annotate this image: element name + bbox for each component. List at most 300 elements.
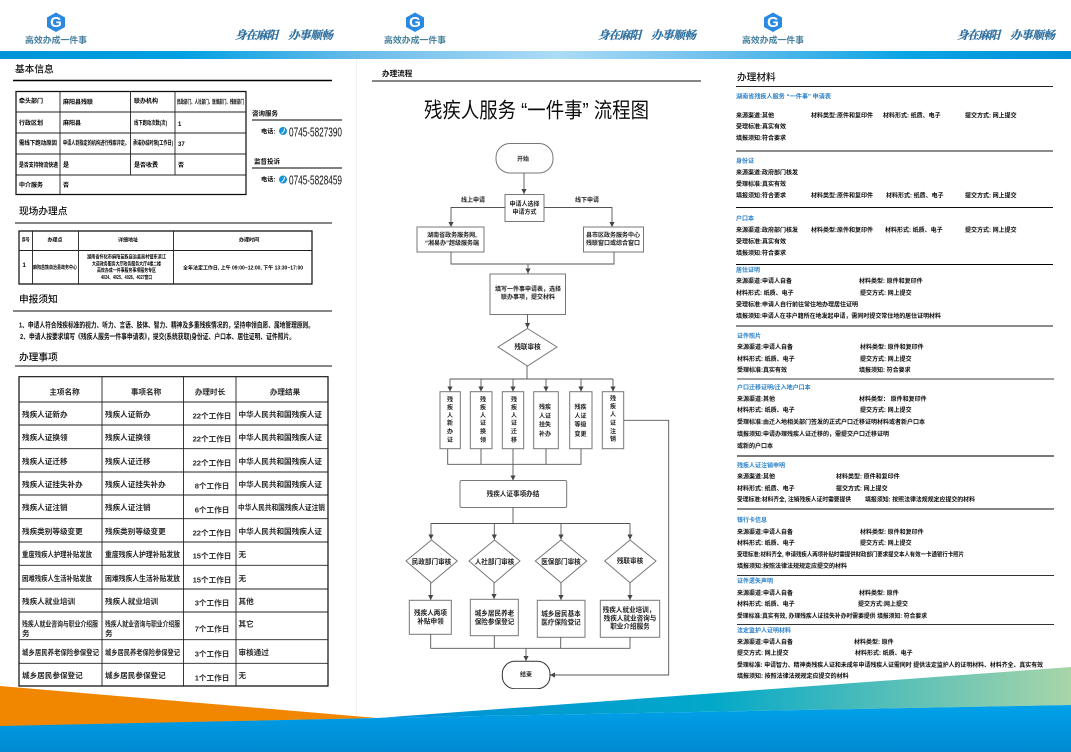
node: fill form: 填写一件事申请表，选择 (495, 285, 561, 293)
complaint service (252, 156, 342, 188)
table rows: 困难残疾人生活补贴发放 (105, 573, 180, 583)
node: choose method: 申请人选择 (509, 200, 540, 208)
material: residence proof: 来源渠道:申请人自备 (736, 277, 792, 285)
table rows: 困难残疾人生活补贴发放 (22, 573, 92, 583)
node: grade change: 人证 (574, 412, 587, 420)
table: on-site locations (19, 231, 312, 284)
node: cancel certificate: 人 (610, 412, 616, 418)
heading: on-site locations: 现场办理点 (19, 204, 68, 218)
heading: application notes: 申报须知 (19, 292, 58, 306)
table: basic info: 中介服务 (19, 181, 43, 189)
material: household transfer: 材料类型： 原件和复印件 (859, 395, 927, 403)
material: guardian proof: 提交方式: 网上提交 (737, 649, 789, 657)
branch arrows to departments (431, 508, 630, 540)
table header (49, 386, 301, 396)
table: on-site locations: 大道政务服务大厅政务服务大厅4楼二楼 (92, 260, 161, 268)
material: photo: 材料类型: 原件和复印件 (860, 343, 924, 351)
table: basic info: 1 (178, 122, 182, 128)
node: online portal: “湘易办”超级服务端 (425, 239, 479, 247)
table rows: 残疾人证挂失补办 (22, 479, 83, 489)
node: employment services (600, 600, 660, 637)
logo centre (384, 12, 446, 45)
node: lost certificate: 挂失 (539, 420, 551, 428)
page divider left (356, 59, 358, 716)
table rows: 残疾类别等级变更 (22, 526, 83, 536)
material: bank card: 受理标准:材料齐全, 申请残疾人两项补贴时需提供财政部门要求提交本人有效一卡通银行卡照片 (737, 550, 964, 558)
table rows: 22个工作日 (193, 434, 231, 444)
node: replace certificate: 疾 (480, 404, 486, 412)
table: basic info: 37 (178, 142, 185, 148)
footer decoration (0, 667, 1071, 752)
node: lost certificate: 残疾 (539, 403, 551, 411)
application notes text: 1、申请人符合残疾标准的视力、听力、言语、肢体、智力、精神及多重残疾情况的，坚持申领自愿、属地管理原则。 (19, 320, 314, 330)
slogan right: 身在麻阳 (957, 29, 1002, 42)
table rows: 残疾人就业咨询与职业介绍服 (22, 618, 98, 628)
material: loss statement: 材料形式: 纸质、电子 (737, 600, 795, 608)
table: on-site locations: 湖南省怀化市麻阳苗族自治县高村镇东滨江 (87, 254, 166, 260)
material: residence proof: 居住证明 (736, 266, 760, 274)
flowchart (406, 144, 669, 689)
material: photo (737, 332, 1054, 379)
table header: 事项名称 (131, 386, 162, 396)
table: basic info: 麻阳县 (63, 119, 81, 127)
table: on-site locations: 全年法定工作日, 上午 09:00~12:00, 下午 13:30~17:00 (183, 264, 303, 272)
decision: medical insurance (535, 540, 587, 583)
heading: basic info: 基本信息 (15, 62, 54, 76)
material: household register: 户口本 (736, 214, 754, 222)
table: basic info: 否 (63, 182, 69, 189)
node: offline window (584, 227, 644, 252)
start node (496, 144, 553, 173)
material: bank card: 材料类型: 原件和复印件 (860, 528, 924, 536)
decision: civil affairs: 民政部门审核 (412, 557, 452, 566)
material: household transfer: 材料形式: 纸质、电子 (737, 406, 795, 414)
table rows: 8个工作日 (195, 480, 229, 490)
node: items completed (460, 480, 567, 508)
table: on-site locations: 办理时间 (239, 236, 259, 244)
material: application form: 受理标准:真实有效 (736, 122, 786, 130)
table rows: 残疾人证换领 (105, 432, 151, 442)
branch online (451, 196, 505, 227)
table rows: 残疾类别等级变更 (105, 526, 166, 536)
table: basic info: 线下跑动次数(次) (134, 119, 167, 127)
node: fill form: 联办事项，提交材料 (501, 293, 555, 301)
slogan right: 办事顺畅 (1010, 29, 1056, 42)
material: household transfer: 受理标准:由迁入地相关部门签发的正式户口迁移证明材料或者新户口本 (737, 418, 925, 426)
material: ID card (736, 157, 1053, 208)
table rows: 重度残疾人护理补贴发放 (105, 549, 180, 559)
table rows: 中华人民共和国残疾人证 (238, 526, 322, 536)
node: transfer certificate: 人 (511, 412, 517, 420)
slogan centre: 办事顺畅 (651, 29, 698, 42)
table rows: 22个工作日 (193, 458, 231, 468)
node: replace certificate (470, 392, 492, 449)
node: grade change: 残疾 (574, 403, 587, 411)
arrow: cancel to end (550, 420, 669, 675)
material: cancellation statement: 提交方式: 网上提交 (836, 484, 888, 492)
decision: disability federation review: 残联审核 (514, 342, 541, 351)
end node (502, 661, 550, 689)
logo right: G (767, 14, 779, 31)
consult service: 咨询服务 (252, 108, 278, 118)
table rows: 城乡居民参保登记 (22, 670, 83, 680)
material: household transfer: 或新的户口本 (737, 442, 773, 450)
table: basic info: 行政区划 (19, 119, 43, 127)
material: loss statement: 来源渠道:申请人自备 (737, 589, 793, 597)
table rows: 22个工作日 (193, 528, 231, 538)
material: application form: 填报须知:符合要求 (736, 134, 786, 142)
application notes text: 2、申请人按要求填写《残疾人服务一件事申请表》，提交(系统获取)身份证、户口本、居住证明、证件照片。 (20, 332, 295, 341)
table: basic info: 是否收费 (134, 161, 158, 169)
table rows: 6个工作日 (195, 504, 229, 514)
node: cancel certificate: 注 (610, 428, 616, 436)
material: household register: 提交方式: 网上提交 (965, 226, 1017, 234)
table rows: 残疾人证注销 (105, 502, 151, 512)
material: cancellation statement: 残疾人证注销申明 (737, 462, 785, 470)
table rows: 残疾人证迁移 (22, 456, 68, 466)
node: transfer certificate: 残 (511, 396, 517, 404)
material: household transfer: 填报须知:申请办理残疾人证迁移的，需提交户口迁移证明 (737, 430, 889, 438)
material: residence proof: 填报须知:申请人在非户籍所在地发起申请，需同时提交常住地的居住证明材料 (736, 312, 941, 320)
material: ID card: 受理标准:真实有效 (736, 180, 786, 188)
node: transfer certificate (502, 392, 524, 449)
slogan left: 办事顺畅 (288, 29, 334, 42)
table rows: 中华人民共和国残疾人证 (238, 456, 322, 466)
material: residence proof: 提交方式: 网上提交 (860, 289, 912, 297)
node: employment services: 残疾人就业咨询与 (604, 614, 657, 622)
node: medical insurance registration (537, 600, 585, 637)
table rows: 中华人民共和国残疾人证注销 (238, 502, 325, 512)
material: application form: 来源渠道:其他 (736, 112, 774, 120)
table rows: 城乡居民参保登记 (105, 670, 166, 680)
material: loss statement: 材料类型: 原件 (859, 589, 899, 597)
material: household register (736, 214, 1053, 264)
table header: 办理结果 (270, 386, 301, 396)
table: basic info: 牵头部门 (19, 97, 43, 105)
material: cancellation statement: 材料形式: 纸质、电子 (737, 484, 795, 492)
material: application form (736, 92, 1053, 151)
node: online portal: 湖南省政务服务网, (427, 231, 477, 239)
table rows: 残疾人证新办 (22, 409, 68, 419)
decision: civil affairs (406, 540, 457, 583)
table: on-site locations: 详细地址 (118, 236, 138, 244)
material: cancellation statement: 受理标准:材料齐全, 注销残疾人证时需要提供 (737, 496, 851, 504)
node: choose method (505, 194, 544, 222)
start node: 开始 (517, 155, 529, 163)
node: offline window: 县市区政务服务中心 (586, 231, 640, 239)
header gradient band (0, 51, 1071, 59)
decision: disability federation: 残联审核 (617, 556, 644, 565)
slogan left (235, 29, 334, 42)
node: cancel certificate: 证 (610, 419, 616, 427)
decision: disability federation (605, 540, 656, 583)
arrows to department results (431, 583, 630, 600)
table rows: 城乡居民养老保险参保登记 (105, 647, 180, 657)
material: household transfer: 来源渠道:其他 (737, 395, 775, 403)
table: on-site locations: 麻阳苗族自治县政务中心 (33, 264, 77, 271)
node: fill form (490, 274, 566, 314)
table rows: 7个工作日 (195, 624, 229, 634)
node: offline window: 残联窗口或综合窗口 (586, 239, 640, 247)
heading: items: 办理事项 (19, 350, 58, 364)
merge arrow to end (431, 634, 630, 661)
material: household register: 填报须知:符合要求 (736, 249, 786, 257)
material: photo: 证件照片 (737, 332, 761, 340)
node: cancel certificate: 残 (610, 394, 616, 402)
material: household transfer (737, 384, 1054, 456)
node: pension insurance: 保险参保登记 (475, 617, 515, 626)
material: guardian proof: 来源渠道:申请人自备 (737, 638, 793, 646)
node: lost certificate: 人证 (539, 412, 551, 420)
node: replace certificate: 领 (480, 436, 486, 444)
node: new certificate: 疾 (447, 404, 453, 412)
decision: human resources: 人社部门审核 (475, 557, 515, 566)
heading: materials: 办理材料 (737, 70, 776, 84)
node: two subsidies (409, 600, 451, 634)
material: application form: 提交方式: 网上提交 (965, 112, 1017, 120)
table header: 主项名称 (49, 386, 80, 396)
material: ID card: 来源渠道:政府部门核发 (736, 168, 798, 176)
table rows: 22个工作日 (193, 410, 231, 420)
table: basic info: 否 (178, 162, 184, 169)
slogan centre (598, 29, 698, 42)
node: medical insurance registration: 城乡居民基本 (541, 609, 581, 618)
node: employment services: 残疾人就业培训， (603, 605, 655, 614)
material: guardian proof: 材料类型: 原件 (854, 638, 894, 646)
table rows: 残疾人就业培训 (22, 596, 76, 606)
table rows: 其他 (238, 596, 254, 606)
complaint service: 0745-5828459 (289, 174, 342, 188)
node: lost certificate (534, 392, 558, 449)
node: new certificate: 残 (447, 396, 453, 404)
material: household register: 材料形式: 纸质、电子 (885, 226, 943, 234)
material: photo: 受理标准:真实有效 (737, 366, 787, 374)
material: household register: 材料类型:原件和复印件 (811, 226, 873, 234)
table rows: 无 (238, 574, 246, 583)
complaint service: 监督投诉 (254, 156, 280, 166)
consult service: 0745-5827390 (289, 126, 342, 140)
material: guardian proof: 填报须知: 按照法律法规规定应提交的材料 (737, 672, 849, 680)
slogan left: 身在麻阳 (235, 29, 280, 42)
table: on-site locations: 4024、4025、4026、4027窗口 (101, 274, 152, 281)
complaint service: 电话: (261, 176, 275, 184)
material: bank card: 来源渠道:申请人自备 (737, 528, 793, 536)
material: ID card: 材料类型:原件和复印件 (811, 192, 873, 200)
node: medical insurance registration: 医疗保险登记 (541, 618, 581, 626)
node: two subsidies: 补贴申领 (417, 616, 444, 626)
table rows: 残疾人证注销 (22, 502, 68, 512)
material: guardian proof (737, 626, 1043, 680)
material: cancellation statement: 填报须知: 按照法律法规规定应提交的材料 (865, 496, 975, 504)
table rows: 无 (238, 550, 246, 559)
table rows: 其它 (238, 618, 254, 628)
material: loss statement (737, 577, 1054, 624)
table rows: 3个工作日 (195, 598, 229, 608)
logo centre: 高效办成一件事 (384, 34, 446, 45)
material: household register: 来源渠道:政府部门核发 (736, 226, 798, 234)
material: bank card: 填报须知:按照法律法规规定应提交的材料 (737, 562, 847, 570)
material: residence proof: 受理标准:申请人自行前往常住地办理居住证明 (736, 300, 858, 308)
material: application form: 材料类型:原件和复印件 (811, 112, 873, 120)
node: transfer certificate: 疾 (511, 404, 517, 412)
node: grade change: 变更 (574, 430, 587, 438)
node: employment services: 职业介绍服务 (610, 622, 650, 630)
node: replace certificate: 换 (480, 428, 486, 436)
node: transfer certificate: 移 (511, 436, 517, 444)
merge arrow (451, 252, 614, 274)
table rows: 3个工作日 (195, 648, 229, 658)
material: bank card: 银行卡信息 (737, 516, 767, 524)
table rows: 中华人民共和国残疾人证 (238, 409, 322, 419)
logo left: G (50, 14, 62, 31)
logo right: 高效办成一件事 (742, 34, 804, 45)
table: basic info: 是否支持物流快递 (19, 161, 58, 169)
table rows: 中华人民共和国残疾人证 (238, 479, 322, 489)
heading: process: 办理流程 (382, 68, 413, 78)
table: on-site locations: 办理点 (47, 236, 63, 244)
node: cancel certificate: 销 (610, 435, 616, 443)
material: guardian proof: 法定监护人证明材料 (737, 626, 791, 634)
flowchart title: 残疾人服务 “一件事” 流程图 (424, 100, 649, 122)
node: grade change (570, 392, 592, 449)
decision: disability federation review (498, 328, 557, 366)
material: cancellation statement (737, 462, 1054, 509)
material: loss statement: 证件遗失声明 (737, 577, 773, 585)
material: ID card: 材料形式: 纸质、电子 (886, 192, 944, 200)
branch offline: 线下申请 (575, 196, 599, 204)
logo left (25, 12, 87, 45)
material: household register: 受理标准:真实有效 (736, 238, 786, 246)
table rows (22, 409, 325, 682)
node: two subsidies: 残疾人两项 (414, 608, 447, 617)
merge arrow to completion (448, 449, 581, 480)
end node: 结束 (520, 670, 532, 678)
node: new certificate: 新 (447, 419, 453, 427)
material: residence proof: 材料形式: 纸质、电子 (736, 289, 794, 297)
consult service: 电话: (261, 128, 275, 136)
consult service (252, 108, 342, 140)
slogan right (957, 29, 1056, 42)
node: grade change: 等级 (574, 420, 587, 428)
table: on-site locations: 序号 (22, 236, 30, 244)
table: items (19, 377, 328, 686)
table: basic info: 麻阳县残联 (63, 98, 93, 106)
material: bank card (737, 516, 1054, 576)
table rows: 务 (105, 628, 113, 638)
material: photo: 提交方式: 网上提交 (860, 355, 912, 363)
table rows: 残疾人证挂失补办 (105, 479, 166, 489)
decision: human resources (469, 540, 520, 583)
node: lost certificate: 补办 (539, 430, 551, 438)
table: basic info: 需线下跑动原因 (19, 139, 57, 147)
branch arrows to six items (450, 366, 613, 392)
node: online portal (417, 227, 484, 252)
table rows: 1个工作日 (195, 672, 229, 682)
branch offline (544, 196, 612, 227)
node: replace certificate: 残 (480, 396, 486, 404)
node: cancel certificate (602, 392, 624, 449)
material: photo: 来源渠道:申请人自备 (737, 343, 793, 351)
node: replace certificate: 证 (480, 419, 486, 427)
table: basic info: 联办机构 (134, 97, 158, 105)
node: choose method: 申请方式 (512, 208, 537, 216)
arrow: start to choice (523, 173, 525, 194)
table rows: 残疾人证迁移 (105, 456, 151, 466)
material: residence proof (736, 266, 1053, 326)
table rows: 城乡居民养老保险参保登记 (22, 647, 99, 657)
node: pension insurance (470, 599, 518, 636)
table header: 办理时长 (195, 386, 226, 396)
table rows: 15个工作日 (193, 574, 231, 584)
branch online: 线上申请 (461, 196, 485, 204)
node: new certificate: 证 (447, 436, 453, 444)
node: transfer certificate: 证 (511, 419, 517, 427)
logo right (742, 12, 804, 45)
table rows: 中华人民共和国残疾人证 (238, 432, 322, 442)
table rows: 残疾人就业培训 (105, 596, 159, 606)
table rows: 无 (238, 671, 246, 680)
material: loss statement: 提交方式:网上提交 (858, 600, 908, 608)
decision: medical insurance: 医保部门审核 (541, 557, 581, 566)
table rows: 15个工作日 (193, 550, 231, 560)
material: guardian proof: 受理标准: 申请智力、精神类残疾人证和未成年申请残疾人证需同时 提供法定监护人的证明材料、材料齐全、真实有效 (737, 661, 1043, 669)
material: ID card: 填报须知:符合要求 (736, 192, 786, 200)
logo left: 高效办成一件事 (25, 34, 87, 45)
application notes text (19, 320, 314, 341)
table: basic info: 承诺办结时限(工作日) (133, 139, 173, 147)
table rows: 残疾人证换领 (22, 432, 68, 442)
material: household transfer: 提交方式: 网上提交 (860, 406, 912, 414)
node: pension insurance: 城乡居民养老 (475, 608, 515, 618)
material: cancellation statement: 材料类型: 原件和复印件 (836, 472, 900, 480)
material: ID card: 提交方式: 网上提交 (965, 192, 1017, 200)
material: ID card: 身份证 (736, 157, 754, 165)
table rows: 重度残疾人护理补贴发放 (22, 549, 92, 559)
node: new certificate: 办 (447, 428, 453, 436)
slogan centre: 身在麻阳 (598, 29, 644, 42)
table rows: 审核通过 (238, 647, 269, 657)
table: basic info: 申请人到指定的机构进行残疾评定。 (63, 139, 129, 147)
logo centre: G (409, 14, 421, 31)
table: basic info (16, 92, 246, 194)
node: cancel certificate: 疾 (610, 402, 616, 410)
material: photo: 材料形式: 纸质、电子 (737, 355, 795, 363)
material: cancellation statement: 来源渠道:其他 (737, 472, 775, 480)
node: replace certificate: 人 (480, 412, 486, 420)
node: new certificate: 人 (447, 412, 453, 420)
arrow to review (526, 314, 528, 328)
node: transfer certificate: 迁 (511, 428, 517, 436)
table rows: 务 (22, 628, 30, 638)
material: photo: 填报须知: 符合要求 (859, 366, 911, 374)
table: on-site locations: 1 (22, 263, 26, 269)
material: bank card: 材料形式: 纸质、电子 (737, 539, 795, 547)
material: residence proof: 材料类型: 原件和复印件 (859, 277, 923, 285)
material: household transfer: 户口迁移证明/迁入地户口本 (737, 384, 811, 392)
table: basic info: 是 (63, 162, 69, 169)
material: bank card: 提交方式: 网上提交 (860, 539, 912, 547)
table rows: 残疾人就业咨询与职业介绍服 (105, 618, 180, 628)
node: new certificate (440, 392, 460, 449)
node: items completed: 残疾人证事项办结 (487, 489, 540, 498)
material: guardian proof: 材料形式: 纸质、电子 (855, 649, 913, 657)
material: application form: 湖南省残疾人服务 “一件事” 申请表 (736, 92, 831, 100)
material: loss statement: 受理标准:真实有效, 办理残疾人证挂失补办时需要提供 填报须知: 符合要求 (737, 612, 927, 620)
table: on-site locations: 高效办成一件事服务事项服务专区 (97, 267, 156, 274)
table: basic info: 民政部门、人社部门、医保部门、残联部门 (177, 98, 244, 106)
material: application form: 材料形式: 纸质、电子 (883, 112, 941, 120)
table rows: 残疾人证新办 (105, 409, 151, 419)
